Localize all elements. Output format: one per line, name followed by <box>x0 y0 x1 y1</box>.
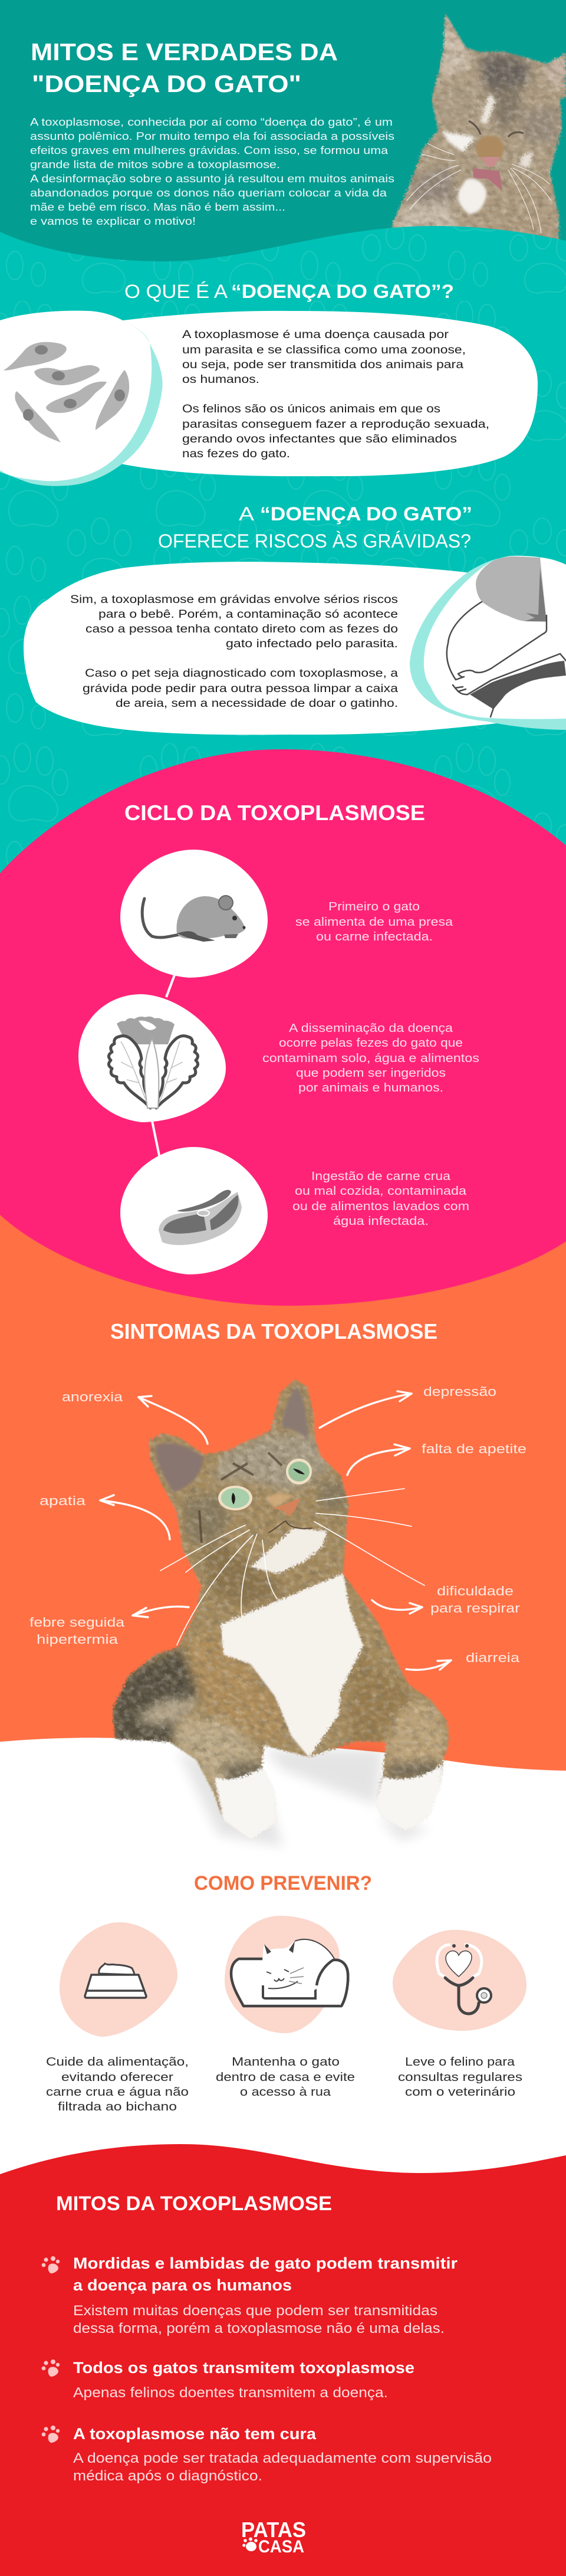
text: step 2: A disseminação da doença <box>289 1022 453 1035</box>
logo: patas da casa <box>241 2518 306 2557</box>
text block: definition: gerando ovos infectantes que são eliminados <box>182 433 457 445</box>
myth 2 <box>73 2359 414 2401</box>
heading: o que é a doença do gato: “DOENÇA DO GATO”? <box>231 281 454 302</box>
arrow: diarreia <box>406 1660 451 1670</box>
text: Mantenha o gato <box>232 2055 340 2069</box>
text block: definition: ou seja, pode ser transmitida dos animais para <box>182 359 464 371</box>
text <box>216 2055 355 2099</box>
blob: meat <box>120 1147 268 1274</box>
arrow: dificuldade <box>372 1600 422 1614</box>
intro text: mãe e bebê em risco. Mas não é bem assim... <box>30 201 285 213</box>
symptom labels: dificuldade <box>437 1584 514 1598</box>
text block: pregnancy: de areia, sem a necessidade de doar o gatinho. <box>116 697 398 710</box>
myth 3: A doença pode ser tratada adequadamente com supervisão <box>73 2450 492 2466</box>
symptom labels: anorexia <box>62 1389 123 1404</box>
card: white pregnancy blob <box>424 556 566 719</box>
icon: steak <box>159 1190 242 1245</box>
heading: ciclo: CICLO DA TOXOPLASMOSE <box>124 801 425 825</box>
text: step 1: Primeiro o gato <box>328 900 420 913</box>
icon: stethoscope <box>437 1944 491 2014</box>
symptom labels: apatia <box>40 1493 86 1508</box>
text block: pregnancy: Sim, a toxoplasmose em grávidas envolve sérios riscos <box>70 594 398 606</box>
panel: cycle <box>0 749 566 1306</box>
text <box>398 2055 522 2099</box>
myth 3: A toxoplasmose não tem cura <box>73 2425 317 2443</box>
text block: pregnancy: para o bebê. Porém, a contaminação só acontece <box>98 608 398 621</box>
symptom labels: depressão <box>423 1384 496 1399</box>
red background <box>0 2144 566 2576</box>
title: MITOS E VERDADES DA <box>31 38 338 65</box>
heading: riscos às grávidas: A <box>239 503 255 525</box>
text: evitando oferecer <box>61 2070 173 2084</box>
card: white pill <box>24 562 501 735</box>
panel: pregnancy card <box>24 556 566 735</box>
card: white pill <box>112 311 538 476</box>
text block: definition: um parasita e se classifica como uma zoonose, <box>182 344 466 356</box>
heading: como prevenir: COMO PREVENIR? <box>194 1872 372 1895</box>
myth 1 <box>73 2254 458 2336</box>
text: filtrada ao bichano <box>58 2100 177 2113</box>
blob: mouse <box>120 850 268 978</box>
intro text: A desinformação sobre o assunto já resultou em muitos animais <box>30 173 394 185</box>
title <box>31 38 338 97</box>
icon: paw bullet 2 <box>42 2359 60 2377</box>
text block: pregnancy: Caso o pet seja diagnosticado com toxoplasmose, a <box>85 667 399 680</box>
heading: riscos às grávidas <box>158 503 472 552</box>
text block: definition: os humanos. <box>182 373 259 386</box>
arrow: febre <box>133 1607 189 1617</box>
card: white parasite blob <box>0 311 152 481</box>
heading: o que é a doença do gato: O QUE É A <box>124 281 228 302</box>
heading: o que é a doença do gato <box>124 281 454 302</box>
intro text: abandonados porque os donos não queriam colocar a vida da <box>30 187 387 199</box>
arrow: anorexia <box>139 1396 208 1444</box>
text: step 3: Ingestão de carne crua <box>311 1170 451 1183</box>
text: step 3: ou de alimentos lavados com <box>292 1200 469 1213</box>
myth 1: Existem muitas doenças que podem ser transmitidas <box>73 2303 437 2319</box>
text: com o veterinário <box>405 2085 515 2099</box>
text block: pregnancy: caso a pessoa tenha contato direto com as fezes do <box>85 623 398 635</box>
icon: parasites <box>4 342 129 443</box>
text: step 1: ou carne infectada. <box>316 930 433 943</box>
symptom arrows <box>100 1391 451 1670</box>
heading: sintomas: SINTOMAS DA TOXOPLASMOSE <box>110 1319 437 1343</box>
intro text: e vamos te explicar o motivo! <box>30 215 196 227</box>
card: aqua shadow <box>410 556 566 730</box>
card: aqua shadow <box>0 311 163 486</box>
title: "DOENÇA DO GATO" <box>32 70 301 97</box>
symptom labels <box>29 1384 526 1665</box>
myth 2: Todos os gatos transmitem toxoplasmose <box>73 2359 414 2377</box>
text: step 2: que podem ser ingeridos <box>296 1067 446 1080</box>
text: step 1 <box>295 900 453 943</box>
photo: cat licking paw <box>390 12 566 240</box>
text: step 2: por animais e humanos. <box>298 1081 443 1094</box>
icon: pregnant belly <box>447 556 566 717</box>
arrow: depressão <box>320 1391 412 1428</box>
text: consultas regulares <box>398 2070 522 2084</box>
icon: lettuce <box>108 1017 198 1108</box>
text: dentro de casa e evite <box>216 2070 355 2084</box>
text: carne crua e água não <box>46 2085 189 2099</box>
text: step 2: contaminam solo, água e alimentos <box>262 1052 479 1065</box>
panel: myths <box>0 2144 566 2576</box>
blob: lettuce <box>78 994 226 1122</box>
panel: prevention home <box>216 1916 355 2099</box>
shadow under cat <box>177 1749 430 1847</box>
icon: food bowl <box>85 1964 146 1998</box>
icon: cat on bed <box>231 1939 348 2006</box>
text: step 2: ocorre pelas fezes do gato que <box>279 1037 463 1050</box>
panel: what is it card <box>0 311 538 486</box>
pink background <box>0 749 566 1306</box>
text block: definition: parasitas conseguem fazer a reprodução sexuada, <box>182 418 489 431</box>
heading: riscos às grávidas: OFERECE RISCOS ÀS GRÁVIDAS? <box>158 530 471 552</box>
text: Cuide da alimentação, <box>46 2055 189 2069</box>
symptom labels: hipertermia <box>37 1632 119 1647</box>
intro text: efeitos graves em mulheres grávidas. Com isso, se formou uma <box>30 145 389 156</box>
text: step 3: água infectada. <box>333 1215 429 1228</box>
myth 1: dessa forma, porém a toxoplasmose não é uma delas. <box>73 2321 445 2336</box>
panel: white section background <box>0 1738 566 2183</box>
logo: patas da casa: PATAS <box>241 2518 306 2542</box>
intro text: grande lista de mitos sobre a toxoplasmose. <box>30 159 280 171</box>
panel: prevention vet <box>393 1930 526 2099</box>
panel: orange background <box>0 1168 566 1782</box>
text block: definition: Os felinos são os únicos animais em que os <box>182 403 440 415</box>
whiskers <box>160 1489 424 1645</box>
heading: riscos às grávidas: “DOENÇA DO GATO” <box>260 503 472 525</box>
text: step 3 <box>292 1170 469 1228</box>
heading: mitos: MITOS DA TOXOPLASMOSE <box>56 2192 332 2215</box>
myth 3: médica após o diagnóstico. <box>73 2468 262 2484</box>
myth 1: Mordidas e lambidas de gato podem transmitir <box>73 2254 458 2272</box>
intro text <box>30 116 394 227</box>
intro text: assunto polêmico. Por muito tempo ela foi associada a possíveis <box>30 130 394 142</box>
text <box>46 2055 189 2113</box>
symptom labels: febre seguida <box>29 1615 125 1630</box>
blob <box>225 1916 340 2033</box>
text block: definition <box>182 329 489 460</box>
blob <box>60 1922 177 2037</box>
panel: light teal background with paw pattern <box>0 226 566 897</box>
symptom labels: falta de apetite <box>422 1441 526 1456</box>
arrow: apatia <box>100 1495 170 1539</box>
text block: pregnancy: gato infectado pelo parasita. <box>226 638 398 650</box>
icon: paw bullet 3 <box>42 2426 60 2443</box>
photo: tabby cat looking up <box>106 1375 460 1847</box>
text: step 3: ou mal cozida, contaminada <box>295 1185 467 1198</box>
text block: pregnancy <box>70 594 399 710</box>
connector lines <box>152 974 175 1158</box>
myth 2: Apenas felinos doentes transmitem a doença. <box>73 2385 388 2401</box>
panel: header background <box>0 0 566 277</box>
symptom labels: para respirar <box>430 1601 520 1615</box>
logo: patas da casa: CASA <box>258 2537 304 2557</box>
arrow: falta de apetite <box>347 1444 410 1475</box>
panel: prevention food <box>46 1922 189 2113</box>
icon: mouse <box>142 896 245 942</box>
symptom labels: diarreia <box>466 1650 520 1665</box>
intro text: A toxoplasmose, conhecida por aí como “doença do gato”, é um <box>30 116 393 128</box>
text block: definition: A toxoplasmose é uma doença causada por <box>182 329 449 341</box>
text: step 1: se alimenta de uma presa <box>295 916 453 929</box>
text: o acesso à rua <box>240 2085 331 2099</box>
blob <box>393 1930 526 2031</box>
myth 1: a doença para os humanos <box>73 2276 292 2294</box>
text: Leve o felino para <box>405 2055 515 2069</box>
text: step 2 <box>262 1022 479 1094</box>
text block: pregnancy: grávida pode pedir para outra pessoa limpar a caixa <box>83 683 399 695</box>
icon: paw bullet 1 <box>42 2256 60 2273</box>
text block: definition: nas fezes do gato. <box>182 448 290 460</box>
myth 3 <box>73 2425 492 2484</box>
